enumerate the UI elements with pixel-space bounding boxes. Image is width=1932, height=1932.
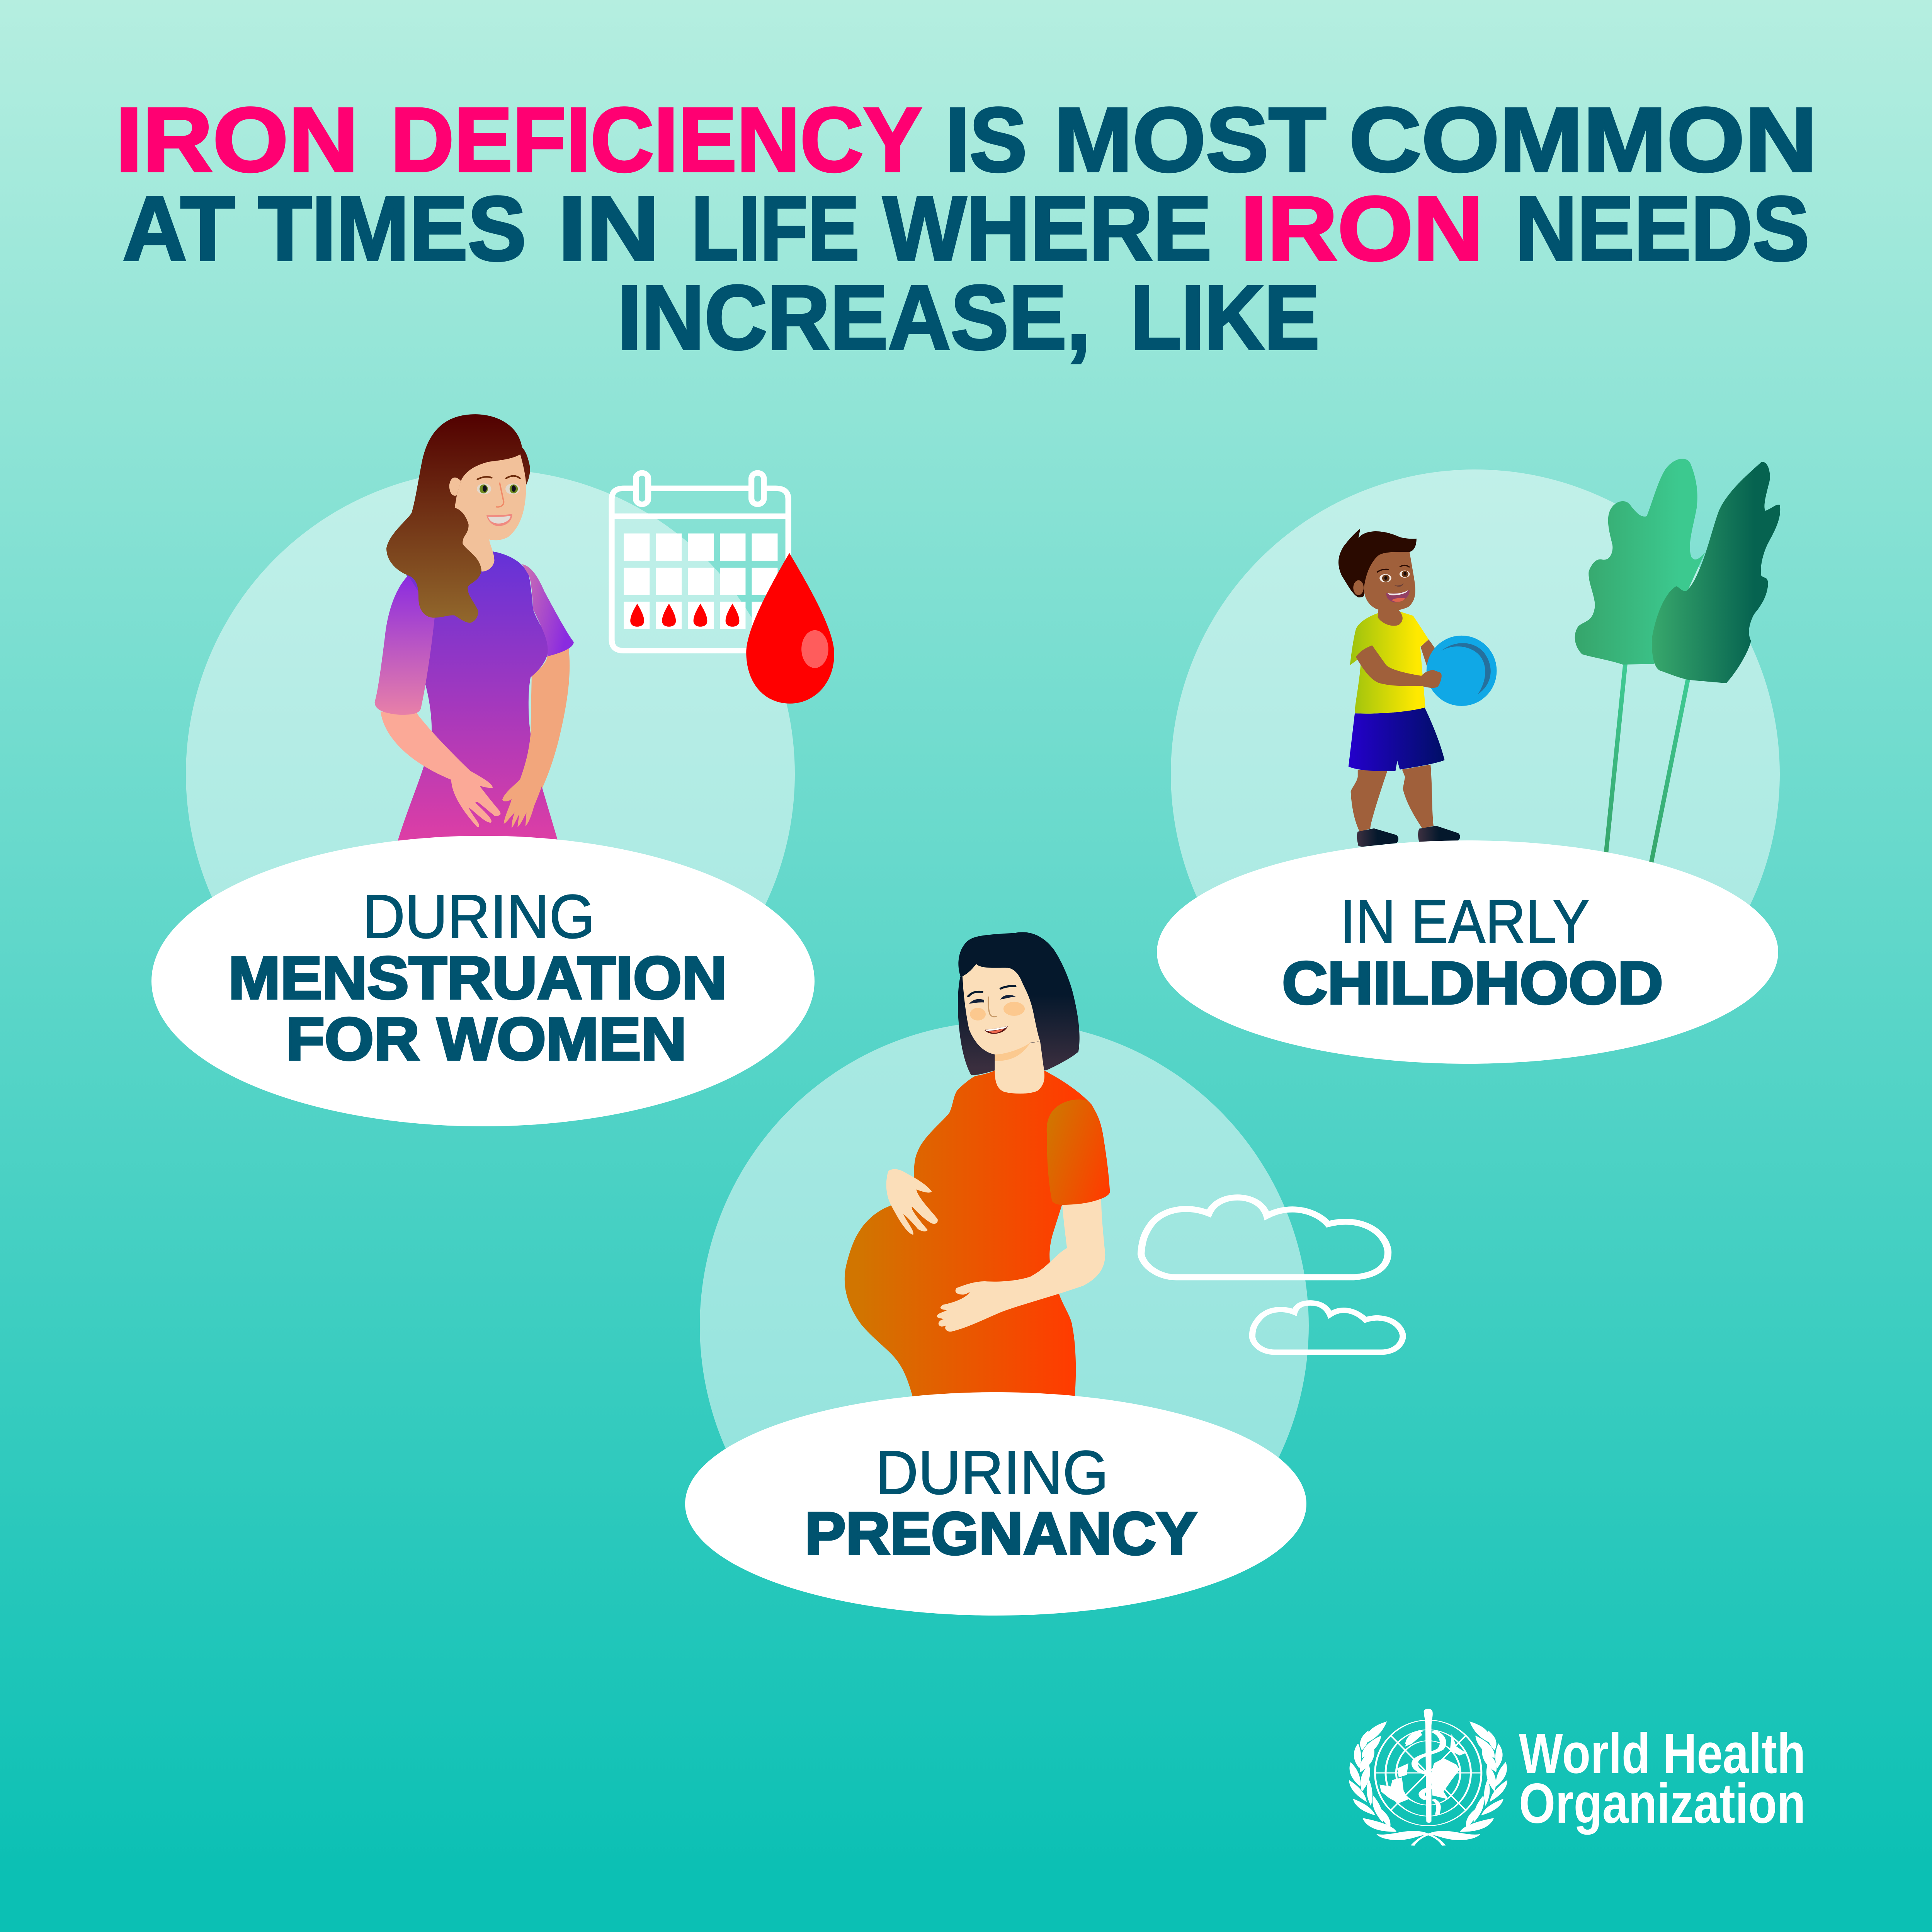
- title: WHERE: [883, 178, 1212, 280]
- panel: menstruation: [151, 414, 834, 1126]
- woman figure: [375, 414, 574, 841]
- oval label: menstruation: MENSTRUATION: [228, 944, 727, 1011]
- illustration: boy with ball and plants: [1338, 459, 1780, 863]
- circle backdrop: pregnancy: [700, 1025, 1309, 1458]
- icon: clouds: [1141, 1197, 1403, 1352]
- icon: WHO emblem: [1349, 1709, 1507, 1846]
- title: IS: [946, 89, 1027, 191]
- title: LIFE: [691, 178, 859, 280]
- plants: [1575, 459, 1780, 863]
- oval label: menstruation: FOR WOMEN: [286, 1005, 687, 1072]
- title: [116, 89, 1817, 369]
- circle backdrop: childhood: [1171, 469, 1780, 906]
- oval label: pregnancy: [685, 1392, 1306, 1616]
- oval label: pregnancy: PREGNANCY: [805, 1500, 1197, 1567]
- boy figure: [1338, 529, 1497, 847]
- oval label: menstruation: DURING: [362, 882, 595, 951]
- calendar icon: [612, 473, 788, 651]
- title: MOST: [1054, 89, 1326, 191]
- illustration: woman with calendar and blood drop: [375, 414, 834, 841]
- WHO logo: [1349, 1709, 1806, 1846]
- oval label: menstruation: [151, 836, 815, 1126]
- oval label: childhood: IN EARLY: [1340, 887, 1590, 956]
- title: NEEDS: [1515, 178, 1810, 280]
- panel: pregnancy: [685, 932, 1403, 1630]
- title: IN: [558, 178, 660, 280]
- title: LIKE: [1131, 267, 1320, 369]
- title: TIMES: [258, 178, 526, 280]
- title: INCREASE,: [617, 267, 1091, 369]
- title: IRON: [116, 89, 359, 191]
- oval label: childhood: [1157, 840, 1778, 1064]
- title: COMMON: [1349, 89, 1817, 191]
- panel: early childhood: [1157, 459, 1780, 1078]
- circle backdrop: menstruation: [186, 469, 795, 1078]
- title: DEFICIENCY: [391, 89, 922, 191]
- wordmark: World Health Organization: [1519, 1721, 1806, 1835]
- icon: blood drop: [746, 553, 834, 704]
- title: AT: [122, 178, 235, 280]
- illustration: pregnant woman and clouds: [845, 932, 1403, 1397]
- title: IRON: [1240, 178, 1483, 280]
- pregnant woman figure: [845, 932, 1110, 1397]
- oval label: childhood: CHILDHOOD: [1282, 949, 1663, 1016]
- oval label: pregnancy: DURING: [876, 1438, 1109, 1507]
